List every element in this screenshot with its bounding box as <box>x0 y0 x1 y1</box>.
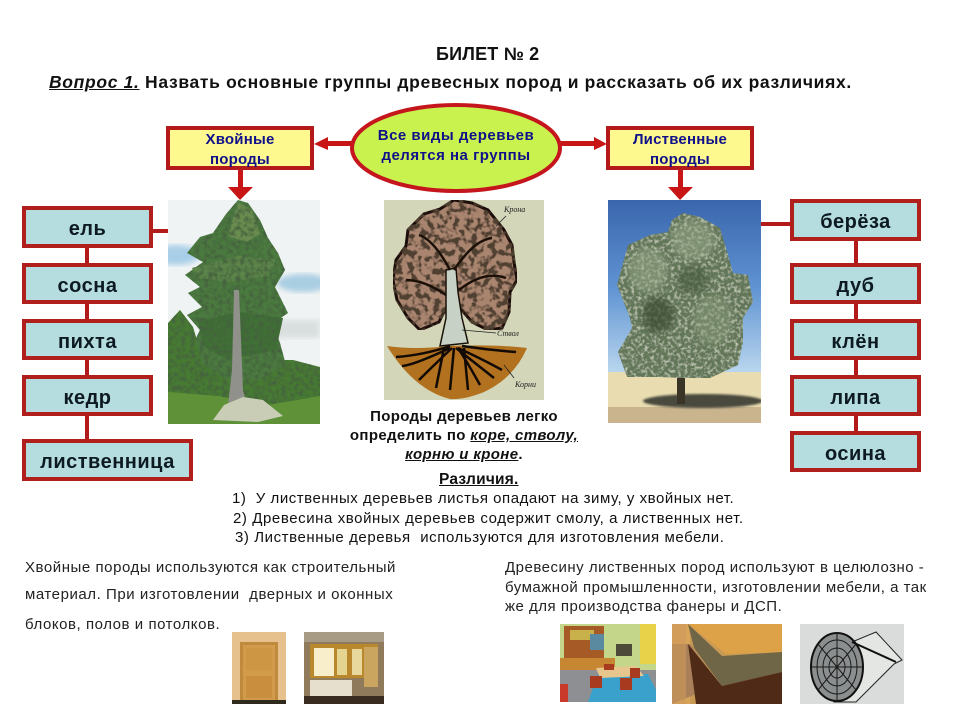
species: дуб: дуб <box>837 274 874 296</box>
group box: conifers: породы <box>210 151 270 168</box>
group box: deciduous: Лиственные <box>633 131 727 148</box>
species: лиственница: лиственница <box>40 451 175 473</box>
text: deciduous uses <box>505 559 927 615</box>
caption: identification of tree species: Породы деревьев легко <box>370 408 558 425</box>
species: клён <box>790 319 921 360</box>
central ellipse: all tree types: делятся на группы <box>381 147 531 164</box>
species: пихта <box>22 319 153 360</box>
difference 1: 1) У лиственных деревьев листья опадают на зиму, у хвойных нет. <box>232 490 734 507</box>
illustration: tree anatomy: Ствол <box>497 329 519 338</box>
title: БИЛЕТ № 2 <box>436 44 539 64</box>
text: deciduous uses: Древесину лиственных пород используют в целюлозно - <box>505 559 924 576</box>
species: ель: ель <box>69 218 106 240</box>
caption: identification of tree species <box>350 408 578 463</box>
text: deciduous uses: же для производства фанеры и ДСП. <box>505 598 782 615</box>
difference 2: 2) Древесина хвойных деревьев содержит смолу, а лиственных нет. <box>233 510 744 527</box>
photo: conifer tree <box>168 200 320 424</box>
text: deciduous uses: бумажной промышленности, изготовлении мебели, а так <box>505 578 927 596</box>
caption: identification of tree species: корню и кроне. <box>405 446 523 463</box>
caption: identification of tree species: определить по коре, стволу, <box>350 427 578 444</box>
group box: deciduous <box>606 126 754 170</box>
illustration: log peeling <box>800 624 904 704</box>
conifer species list <box>22 206 193 481</box>
species: липа: липа <box>830 386 881 408</box>
species: липа <box>790 375 921 416</box>
species: лиственница <box>22 439 193 481</box>
species: сосна: сосна <box>58 274 117 296</box>
central ellipse: all tree types: Все виды деревьев <box>378 127 534 144</box>
illustration: tree anatomy: Корни <box>514 380 536 389</box>
species: ель <box>22 206 153 248</box>
question heading: Вопрос 1. Назвать основные группы древесных пород и рассказать об их различиях. <box>49 72 852 92</box>
species: сосна <box>22 263 153 304</box>
species: кедр <box>22 375 153 416</box>
group box: conifers <box>166 126 314 170</box>
photo: wooden door <box>232 632 286 704</box>
species: осина: осина <box>825 442 886 464</box>
species: кедр: кедр <box>63 386 112 408</box>
species: берёза <box>790 199 921 241</box>
photo: chipboard <box>672 624 782 704</box>
photo: furniture room <box>560 624 656 702</box>
photo: deciduous tree <box>608 200 761 423</box>
text: conifer uses: материал. При изготовлении дверных и оконных <box>25 586 393 603</box>
text: conifer uses: блоков, полов и потолков. <box>25 616 220 633</box>
group box: conifers: Хвойные <box>205 131 275 148</box>
species: пихта: пихта <box>58 330 117 352</box>
text: conifer uses: Хвойные породы используются как строительный <box>25 559 396 576</box>
species: клён: клён <box>831 330 880 352</box>
illustration: tree anatomy: Крона <box>503 205 525 214</box>
illustration: tree anatomy <box>384 200 544 400</box>
group box: deciduous: породы <box>650 151 710 168</box>
species: осина <box>790 431 921 472</box>
differences block <box>232 471 744 546</box>
central ellipse: all tree types <box>350 103 562 193</box>
photo: wooden window <box>304 632 384 704</box>
difference 3: 3) Лиственные деревья используются для изготовления мебели. <box>235 529 724 546</box>
differences heading: Различия. <box>439 471 518 488</box>
species: дуб <box>790 263 921 304</box>
text: conifer uses <box>25 559 396 633</box>
deciduous species list <box>790 199 921 472</box>
species: берёза: берёза <box>820 211 891 233</box>
